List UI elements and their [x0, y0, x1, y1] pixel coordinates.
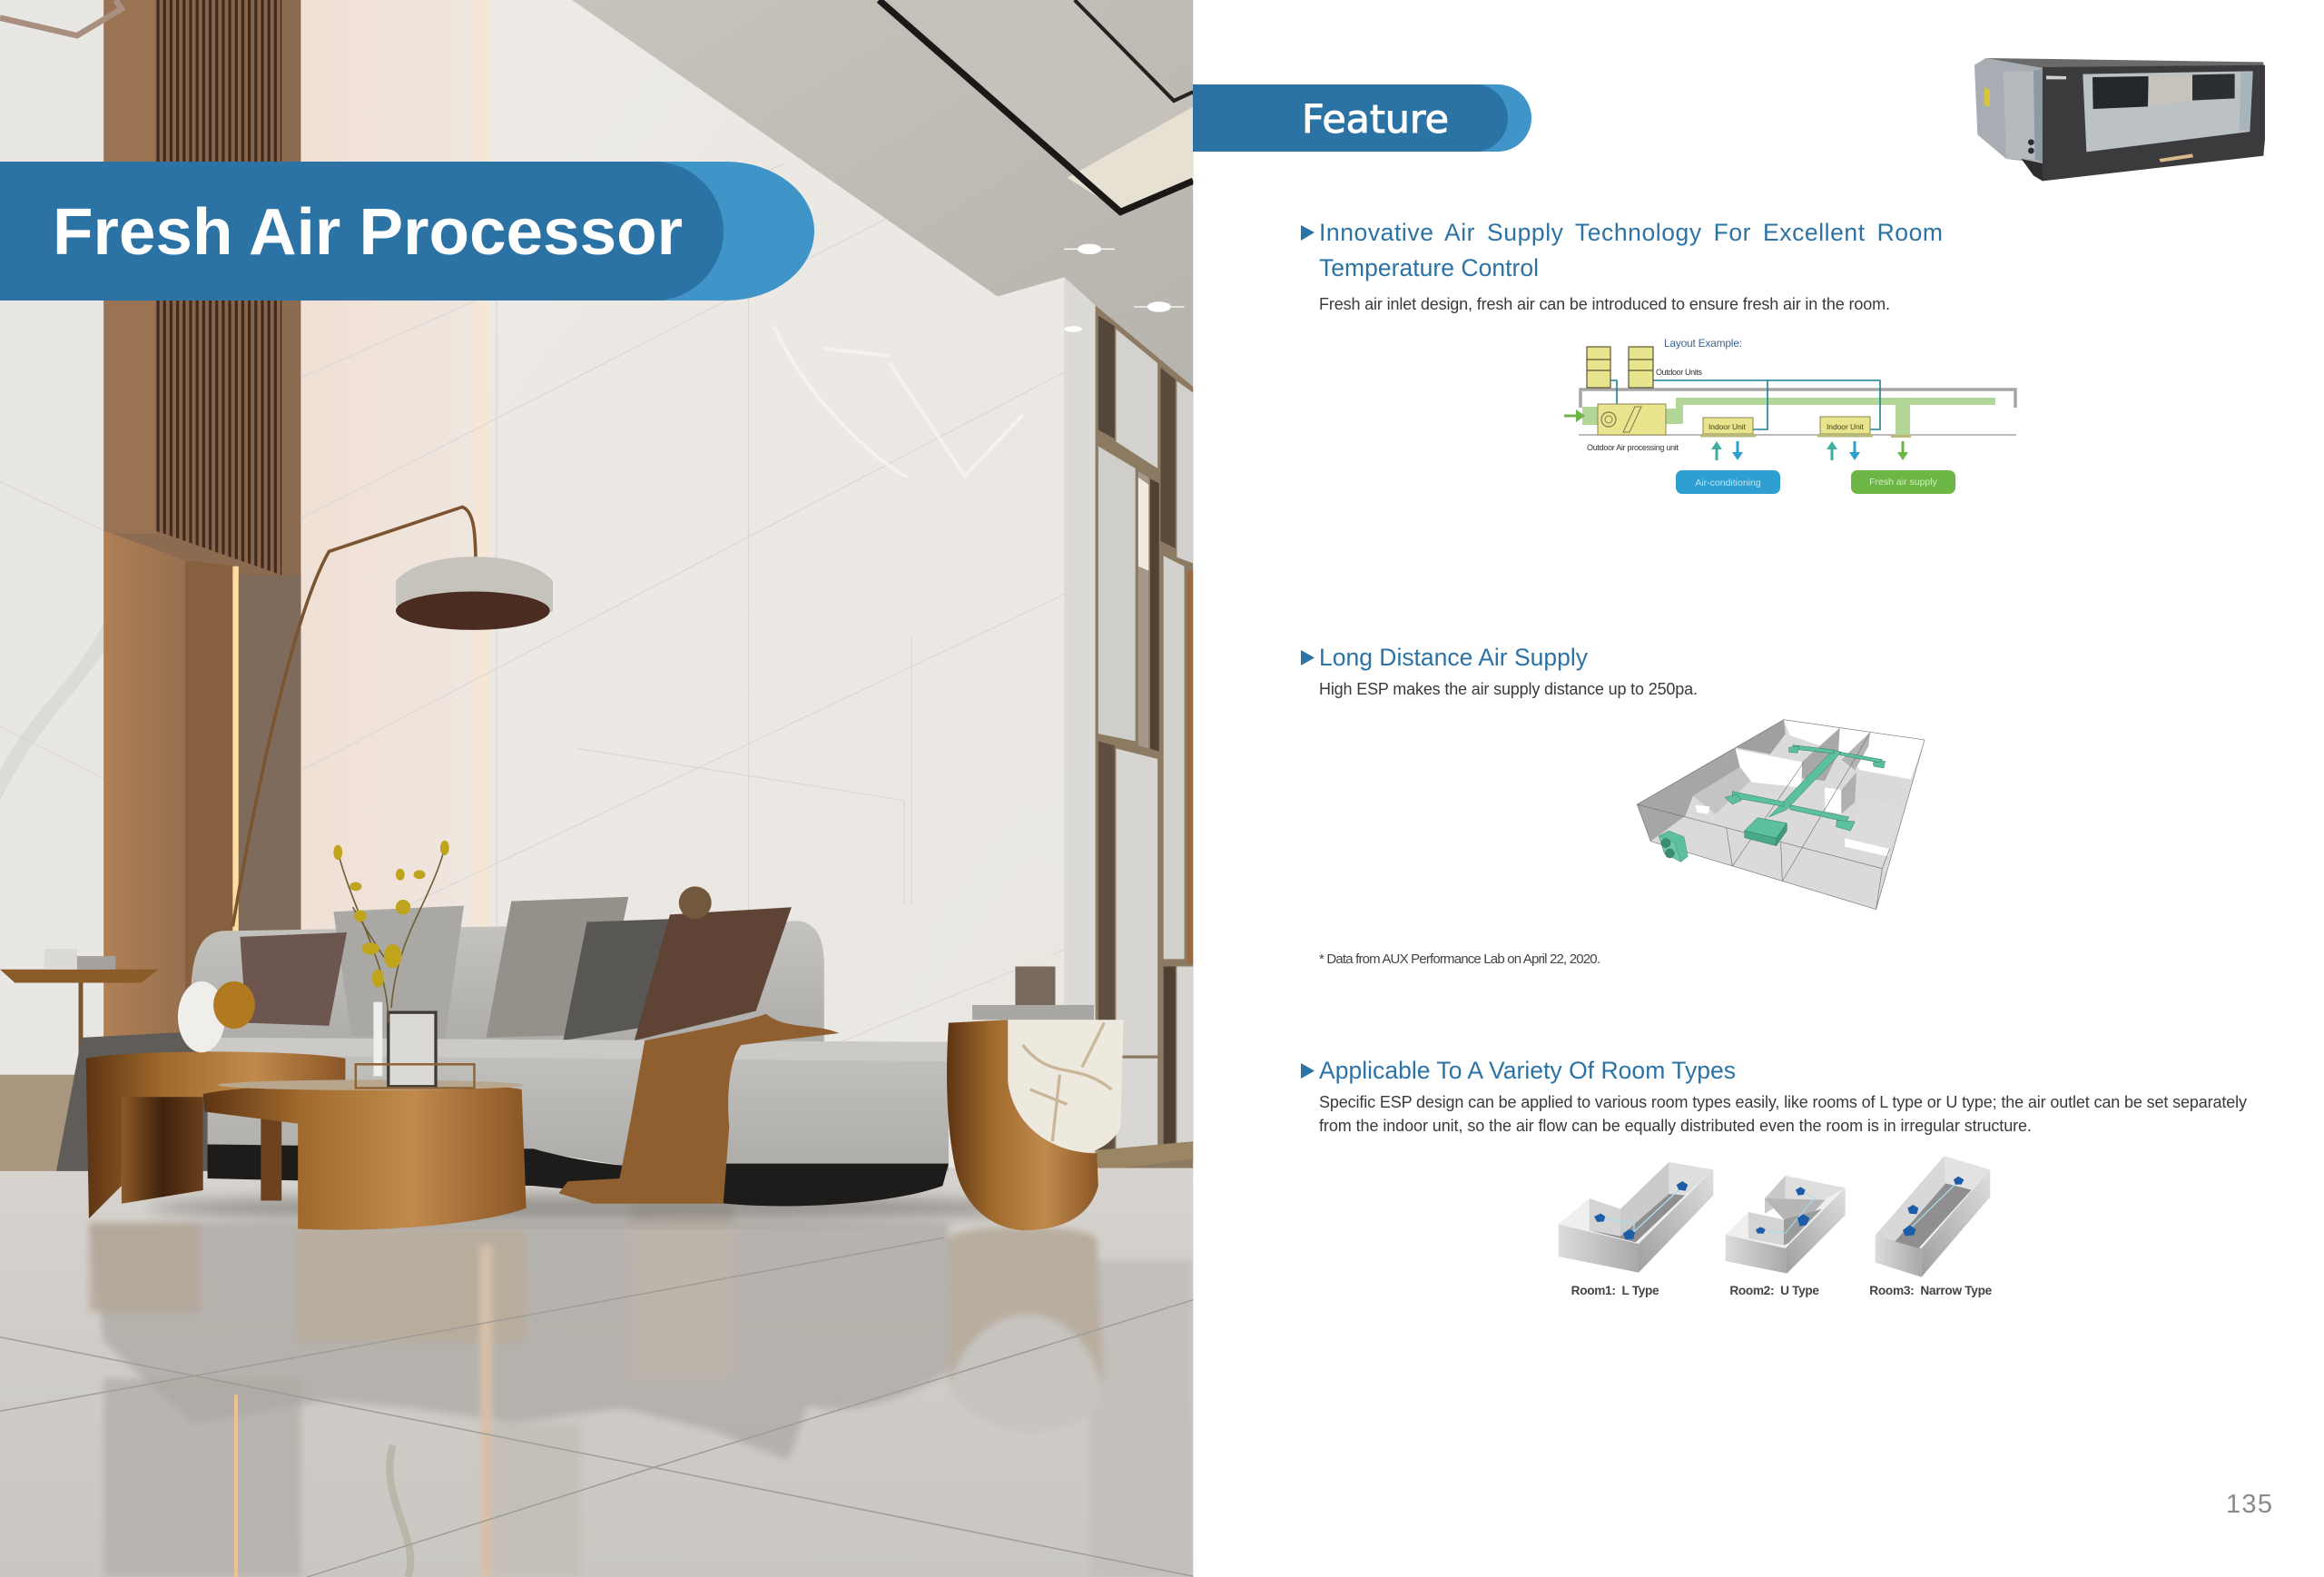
feature heading text: Feature — [1302, 97, 1449, 143]
body text — [1319, 1093, 2247, 1135]
diagram: layout example: Outdoor Air processing unit — [1587, 443, 1679, 452]
outdoor condensing unit — [1659, 831, 1688, 862]
fresh air supply label: Fresh air supply — [1869, 477, 1938, 488]
floor reflections — [89, 1200, 1193, 1577]
air-conditioning label — [1676, 470, 1780, 494]
room labels: Room1: L Type — [1571, 1284, 1659, 1297]
marble veins and panel joints — [0, 163, 1064, 1041]
heading: Applicable To A Variety Of Room Types — [1319, 1057, 1736, 1084]
wood slat column — [103, 0, 301, 1037]
air-conditioning label: Air-conditioning — [1695, 478, 1761, 488]
product photo: ducted fresh air unit — [1974, 58, 2265, 181]
room 3: narrow type — [1876, 1156, 1990, 1277]
heading: Long Distance Air Supply — [1319, 644, 1589, 671]
chrome ceiling ornament — [0, 0, 122, 35]
heading second line: Temperature Control — [1319, 254, 1539, 281]
refrigerant piping — [1610, 380, 1880, 429]
section 2: long distance air supply — [1301, 644, 1698, 698]
section 1: innovative air supply — [1301, 219, 1943, 313]
table decor — [178, 981, 474, 1088]
title text: Fresh Air Processor — [53, 196, 683, 269]
indoor unit 2 — [1817, 417, 1873, 438]
fresh air supply label — [1851, 470, 1955, 494]
floor lamp — [232, 507, 553, 926]
yellow flower branches — [333, 841, 449, 1023]
outdoor air processing unit — [1598, 404, 1666, 435]
diagram: isometric floor plan with ducts — [1637, 720, 1925, 910]
room 1: L type — [1559, 1162, 1713, 1273]
section banner: Feature — [1193, 84, 1531, 152]
title banner — [0, 162, 814, 301]
body text: Fresh air inlet design, fresh air can be introduced to ensure fresh air in the room. — [1319, 295, 1890, 313]
recessed downlights — [1064, 244, 1185, 332]
copper and marble vase stand — [947, 946, 1124, 1230]
intake arrow — [1564, 409, 1585, 422]
interior photo: living room — [0, 0, 1197, 1577]
floor — [0, 1168, 1193, 1577]
heading: Innovative Air Supply Technology For Excellent Room — [1319, 219, 1943, 246]
page number: 135 — [2226, 1490, 2272, 1519]
diagram: layout example: Layout Example: — [1664, 337, 1742, 350]
right wall return and glazed partition — [1064, 277, 1096, 1171]
room labels — [1571, 1284, 1993, 1297]
outdoor units — [1587, 347, 1653, 388]
indoor unit 2: Indoor Unit — [1827, 422, 1865, 431]
airflow arrows — [1711, 441, 1908, 460]
bullet arrow — [1301, 1063, 1315, 1079]
body text: High ESP makes the air supply distance up to 250pa. — [1319, 680, 1698, 698]
section 3: applicable room types — [1301, 1057, 2247, 1135]
floor contact shadow — [148, 1195, 1038, 1221]
ceiling — [572, 0, 1193, 389]
room labels: Room2: U Type — [1729, 1284, 1819, 1297]
diagram: layout example — [1564, 337, 2016, 494]
bullet arrow — [1301, 650, 1315, 665]
body text: from the indoor unit, so the air flow can be equally distributed even the room is in irregular structure. — [1319, 1117, 2032, 1135]
footnote: * Data from AUX Performance Lab on April 22, 2020. — [1319, 951, 1600, 967]
side table — [0, 949, 159, 1171]
diagram: layout example: Outdoor Units — [1656, 368, 1703, 377]
room 2: U type — [1726, 1176, 1846, 1274]
indoor unit 1: Indoor Unit — [1709, 422, 1747, 431]
roof and ceiling lines — [1579, 389, 2016, 435]
copper nesting tables — [86, 1051, 527, 1230]
body text: Specific ESP design can be applied to various room types easily, like rooms of L type or U type; the air outlet can be set separately — [1319, 1093, 2247, 1111]
bullet arrow — [1301, 225, 1315, 241]
green fresh-air ducts — [1582, 398, 1995, 438]
room labels: Room3: Narrow Type — [1869, 1284, 1993, 1297]
teal duct network — [1725, 745, 1886, 846]
indoor unit 1 — [1700, 418, 1756, 438]
sofa — [56, 886, 949, 1206]
room type illustrations — [1559, 1156, 1993, 1297]
